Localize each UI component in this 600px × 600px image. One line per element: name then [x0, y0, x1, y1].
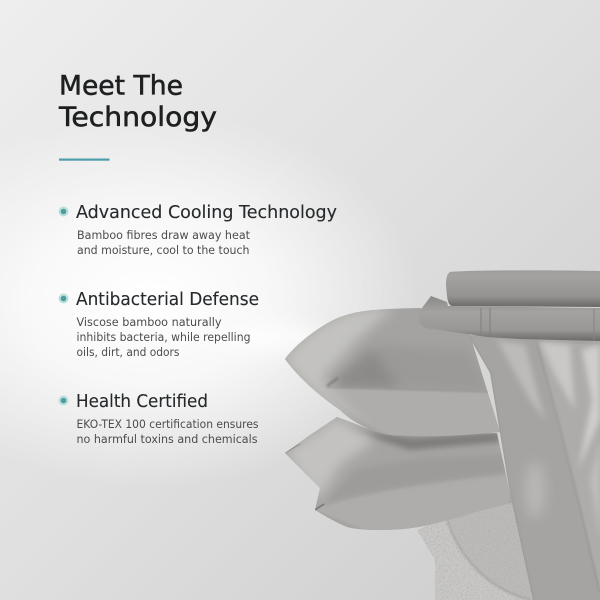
feature: Health Certified — [58, 392, 259, 446]
title: Technology — [58, 102, 217, 133]
icon: teal bullet — [58, 294, 68, 304]
title: Meet The — [59, 70, 183, 102]
feature: Advanced Cooling Technology — [58, 203, 337, 257]
folded sheet, lower — [419, 296, 600, 341]
draped sheet — [460, 330, 600, 600]
lower pillow — [285, 417, 512, 530]
product photo: bedding stack — [280, 270, 600, 600]
description: oils, dirt, and odors — [76, 345, 180, 359]
description: Bamboo fibres draw away heat — [77, 228, 251, 242]
description — [77, 228, 251, 257]
heading: Antibacterial Defense — [76, 290, 259, 310]
description — [76, 315, 250, 359]
description — [76, 417, 259, 446]
description: and moisture, cool to the touch — [77, 243, 250, 257]
upper pillow — [280, 305, 505, 440]
description: no harmful toxins and chemicals — [76, 432, 258, 446]
description: EKO-TEX 100 certification ensures — [76, 417, 259, 431]
icon: teal bullet — [58, 206, 68, 216]
heading: Health Certified — [76, 392, 208, 412]
feature: Antibacterial Defense — [58, 290, 259, 359]
heading: Advanced Cooling Technology — [76, 203, 337, 223]
title — [58, 70, 217, 133]
stone stool — [417, 500, 545, 600]
description: inhibits bacteria, while repelling — [76, 330, 250, 344]
icon: teal bullet — [58, 396, 68, 406]
folded sheet, upper — [446, 270, 600, 307]
accent line — [59, 158, 110, 161]
description: Viscose bamboo naturally — [76, 315, 222, 329]
